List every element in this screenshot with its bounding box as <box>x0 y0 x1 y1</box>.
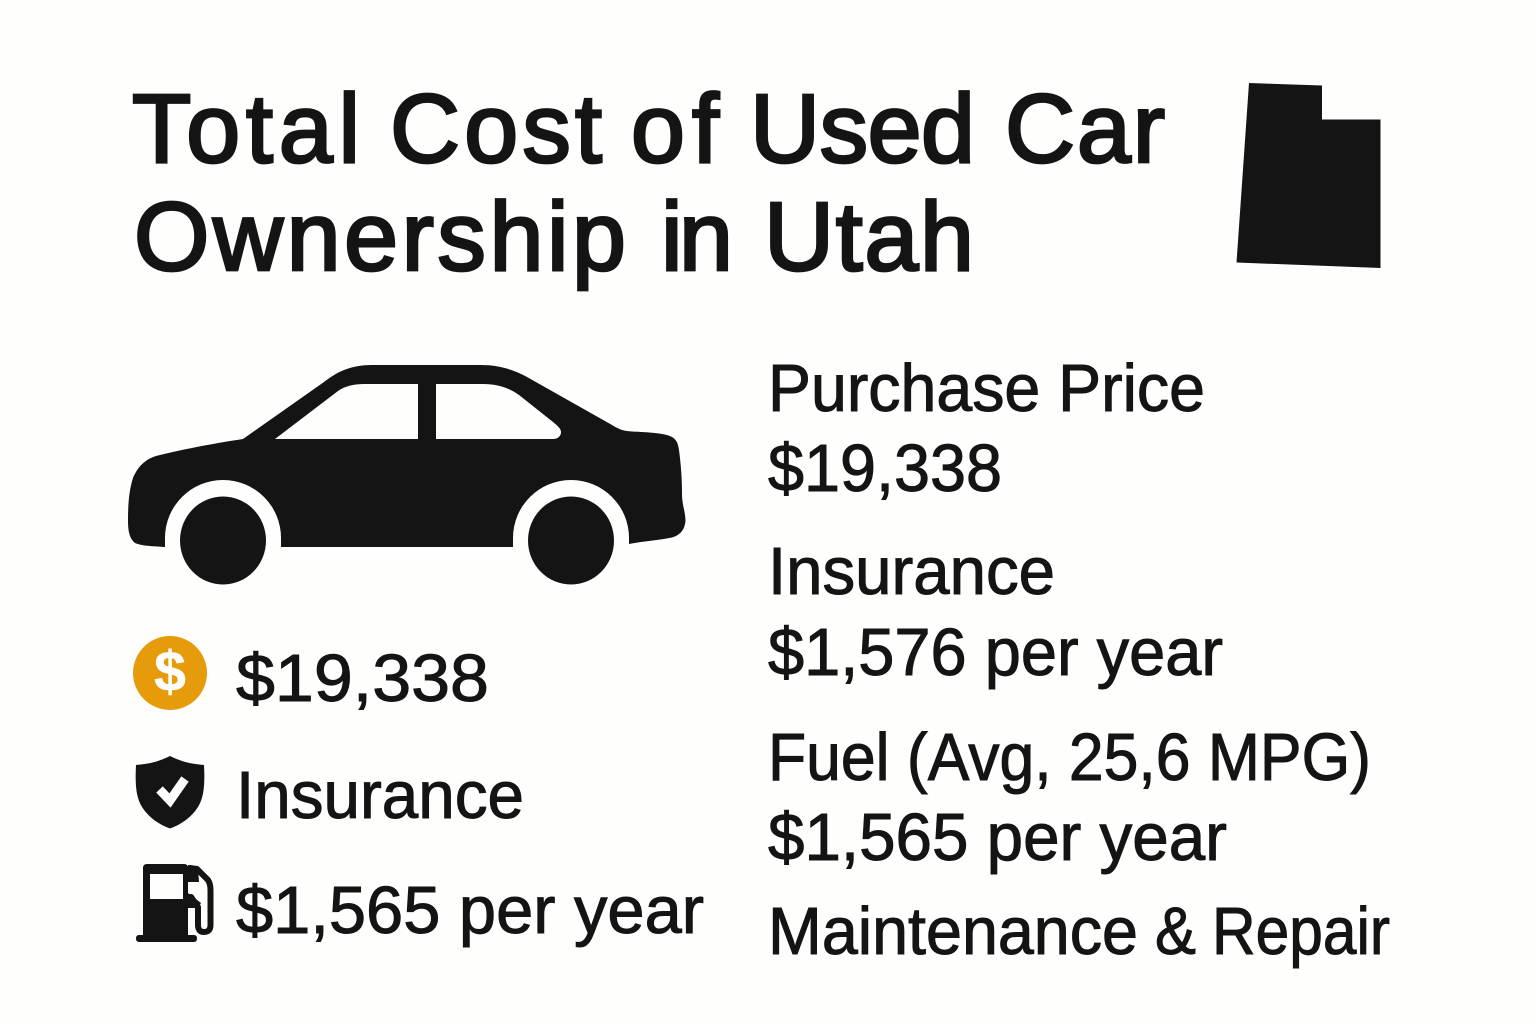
cost item: insurance <box>768 534 1223 690</box>
title: in <box>661 182 733 291</box>
title: of <box>631 74 720 183</box>
icon: shield with check <box>136 756 204 828</box>
cost item: insurance: $1,576 per year <box>768 615 1223 690</box>
icon: Utah state silhouette <box>1236 83 1380 268</box>
cost item: maintenance and repair: Maintenance <box>768 894 1138 969</box>
fuel amount: $1,565 per year <box>236 873 704 948</box>
title <box>132 74 1165 291</box>
title: Used <box>750 74 975 183</box>
cost item: fuel: Fuel (Avg, 25,6 MPG) <box>768 720 1371 795</box>
icon: fuel pump <box>136 864 210 942</box>
cost item: maintenance and repair: Repair <box>1212 894 1390 969</box>
cost item: purchase price: $19,338 <box>768 431 1002 506</box>
title: Utah <box>764 182 974 291</box>
icon: dollar coin: $ <box>154 640 186 704</box>
cost item: fuel: $1,565 per year <box>768 800 1227 875</box>
title: Car <box>1005 74 1165 183</box>
cost item: insurance: Insurance <box>768 534 1055 609</box>
cost item: purchase price: Purchase Price <box>768 351 1205 426</box>
icon: dollar coin <box>133 636 207 710</box>
cost item: fuel <box>768 720 1371 875</box>
icon: car <box>128 365 686 598</box>
title: Cost <box>390 74 602 183</box>
title: Ownership <box>134 182 626 291</box>
insurance label: Insurance <box>236 758 524 833</box>
purchase amount: $19,338 <box>236 641 489 716</box>
cost item: purchase price <box>768 351 1205 506</box>
cost item: maintenance and repair: & <box>1155 894 1196 969</box>
title: Total <box>132 74 360 183</box>
